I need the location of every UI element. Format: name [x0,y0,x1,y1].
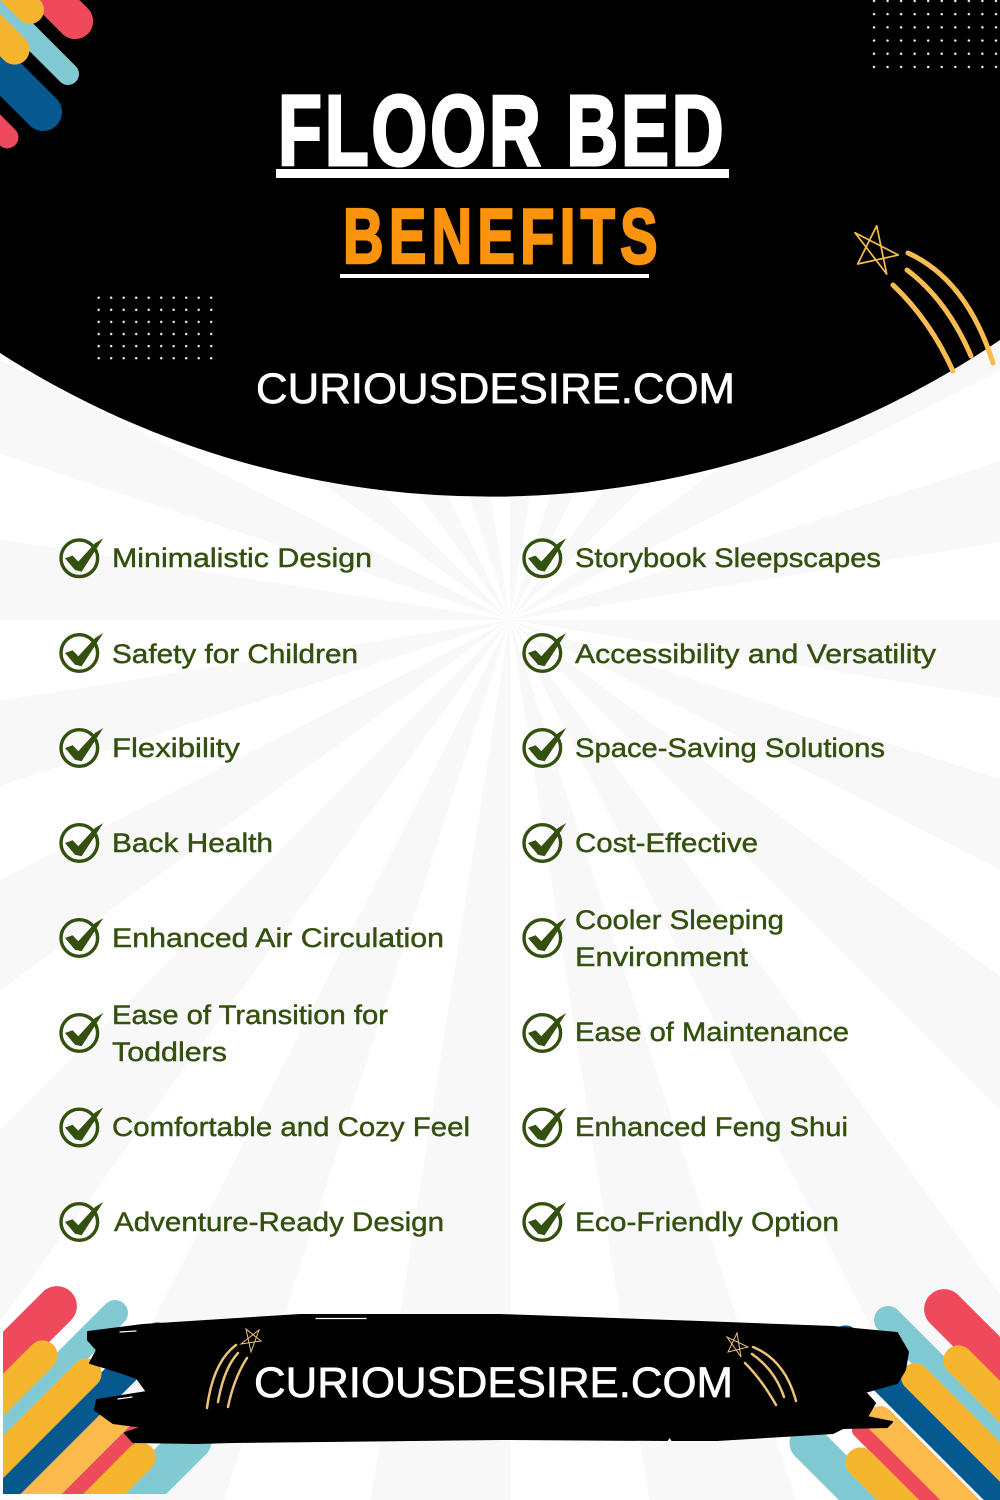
website url banner: CURIOUSDESIRE.COM [254,1359,733,1407]
list item: Safety for Children: Safety for Children [112,639,358,669]
icon: shooting star banner right [727,1333,796,1405]
black brush banner [88,1315,908,1443]
icon: shooting star top right [855,226,993,371]
list item: Ease of Transition for Toddlers: Ease of Transition for [112,1000,388,1030]
brush highlight marks [118,1318,366,1399]
dot grid left [95,294,215,364]
list item: Accessibility and Versatility: Accessibility and Versatility [575,639,937,669]
list item: Enhanced Air Circulation: Enhanced Air Circulation [112,923,444,953]
list item: Back Health [61,823,273,861]
list item: Ease of Maintenance: Ease of Maintenance [575,1017,849,1047]
list item: Adventure-Ready Design: Adventure-Ready Design [114,1207,444,1237]
decorative stripes bottom left [3,1286,212,1494]
list item: Adventure-Ready Design [61,1202,444,1240]
list item: Enhanced Air Circulation [61,918,444,956]
list item: Flexibility [61,728,241,766]
black header panel [0,0,1000,497]
list item: Cooler Sleeping Environment [524,905,784,972]
list item: Storybook Sleepscapes: Storybook Sleepscapes [575,543,881,573]
list item: Comfortable and Cozy Feel: Comfortable and Cozy Feel [112,1112,470,1142]
list item: Minimalistic Design [61,538,372,577]
list item: Back Health: Back Health [112,828,273,858]
title underline [276,169,729,178]
list item: Flexibility: Flexibility [112,733,241,763]
decorative stripes bottom right [789,1289,1000,1500]
list item: Storybook Sleepscapes [524,538,881,577]
list item: Eco-Friendly Option: Eco-Friendly Option [575,1207,839,1237]
list item: Cooler Sleeping Environment: Environment [575,942,749,972]
list item: Ease of Transition for Toddlers [61,1000,388,1067]
list item: Comfortable and Cozy Feel [61,1108,470,1146]
subtitle underline [340,274,649,278]
list item: Cost-Effective [524,823,758,861]
list item: Accessibility and Versatility [524,633,937,671]
list item: Eco-Friendly Option [524,1202,839,1240]
icon: shooting star banner left [207,1329,261,1408]
title: floor bed: FLOOR BED [278,75,724,187]
list item: Space-Saving Solutions [524,728,885,766]
list item: Safety for Children [61,633,358,671]
list item: Ease of Maintenance [524,1013,849,1051]
list item: Minimalistic Design: Minimalistic Design [112,543,372,573]
list item: Cost-Effective: Cost-Effective [575,828,758,858]
subtitle: benefits: BENEFITS [343,193,658,280]
list item: Space-Saving Solutions: Space-Saving Solutions [575,733,885,763]
decorative stripes top left [0,0,93,148]
website url header: CURIOUSDESIRE.COM [256,365,735,413]
list item: Enhanced Feng Shui: Enhanced Feng Shui [575,1112,848,1142]
dot grid right [870,0,1000,73]
list item: Ease of Transition for Toddlers: Toddlers [112,1037,227,1067]
list item: Enhanced Feng Shui [524,1108,848,1146]
list item: Cooler Sleeping Environment: Cooler Sleeping [575,905,784,935]
